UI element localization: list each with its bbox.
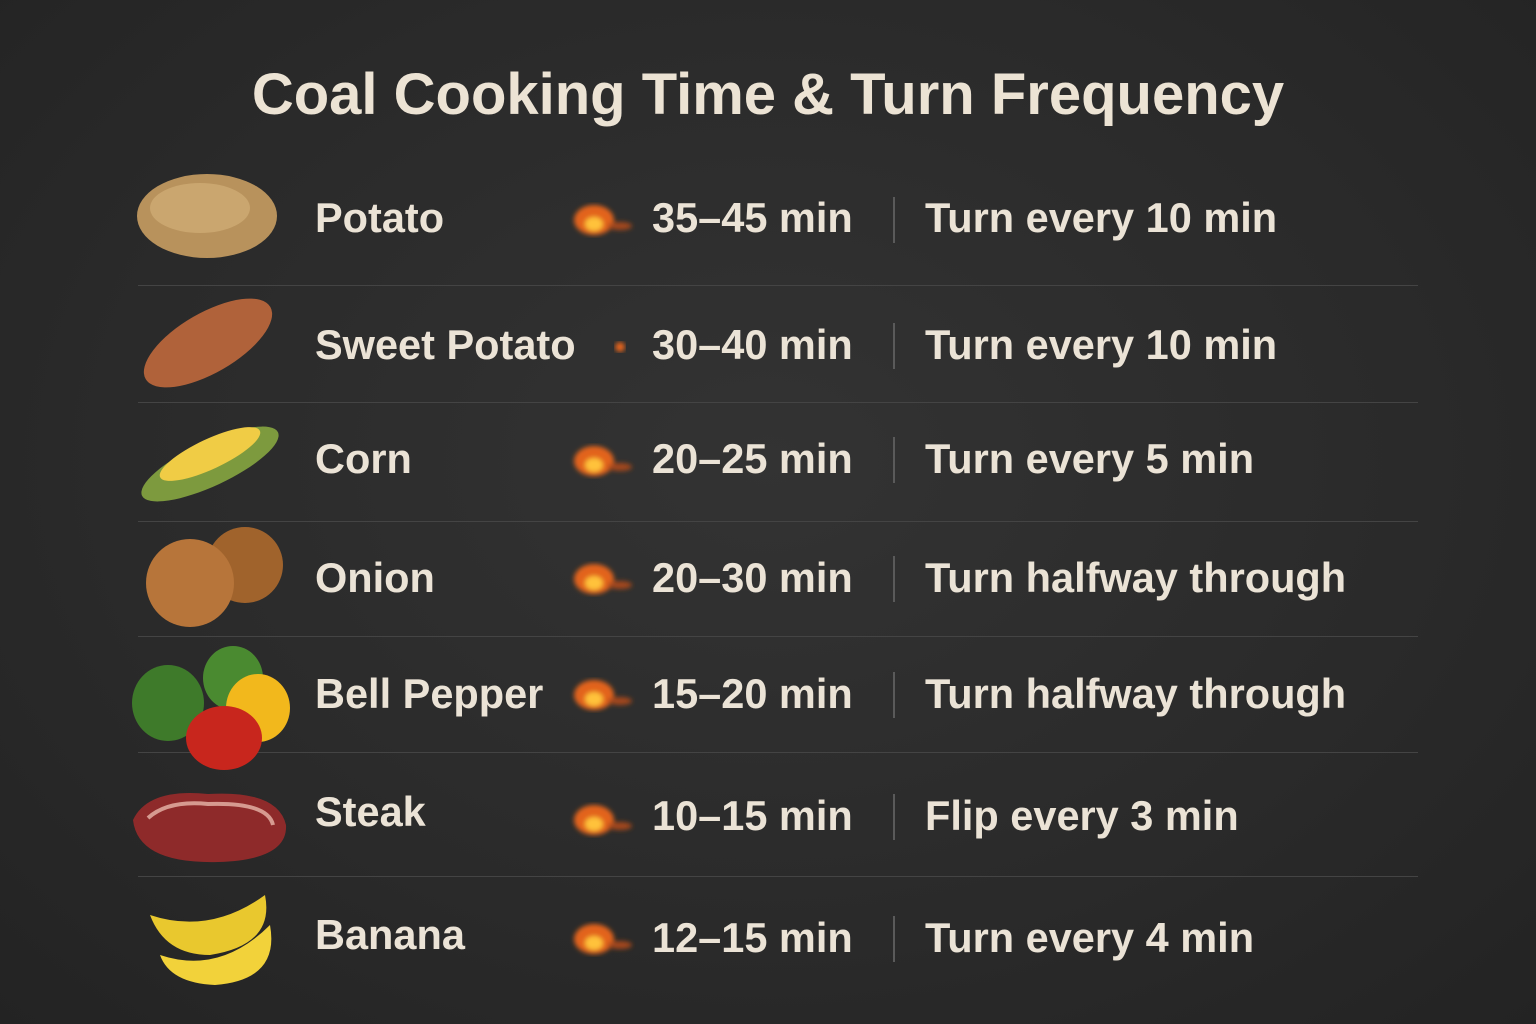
turn frequency: Turn every 10 min [925,321,1277,368]
turn frequency: Turn every 4 min [925,914,1254,961]
row: sweet potato [144,298,1277,388]
row: banana [150,895,1254,985]
row: onion [146,527,1346,627]
cooking time: 15–20 min [652,670,853,717]
icon: fire [570,802,634,838]
cooking time: 35–45 min [652,194,853,241]
row: bell pepper [132,646,1346,770]
food name: Corn [315,435,412,482]
turn frequency: Turn halfway through [925,670,1346,717]
icon: corn [141,426,279,502]
cooking time: 10–15 min [652,792,853,839]
turn frequency: Turn every 5 min [925,435,1254,482]
cooking time: 30–40 min [652,321,853,368]
food name: Bell Pepper [315,670,543,717]
row: steak [133,788,1239,862]
food name: Sweet Potato [315,321,576,368]
icon: fire [570,561,634,597]
food name: Banana [315,911,465,958]
icon: banana [150,895,272,985]
title: Coal Cooking Time & Turn Frequency [252,62,1284,127]
icon: potato [137,174,277,258]
row: potato [137,174,1277,258]
icon: sweet potato [144,298,272,388]
cooking time: 20–30 min [652,554,853,601]
food name: Steak [315,788,426,835]
icon: fire [570,677,634,713]
turn frequency: Turn every 10 min [925,194,1277,241]
icon: fire [570,202,634,238]
icon: bell pepper [132,646,290,770]
icon: fire [570,443,634,479]
cooking time: 12–15 min [652,914,853,961]
row: corn [141,426,1254,502]
food name: Onion [315,554,435,601]
icon: fire [570,921,634,957]
cooking time: 20–25 min [652,435,853,482]
icon: onion [146,527,283,627]
icon: steak [133,793,286,862]
turn frequency: Flip every 3 min [925,792,1239,839]
food name: Potato [315,194,444,241]
turn frequency: Turn halfway through [925,554,1346,601]
icon: fire [614,341,626,353]
